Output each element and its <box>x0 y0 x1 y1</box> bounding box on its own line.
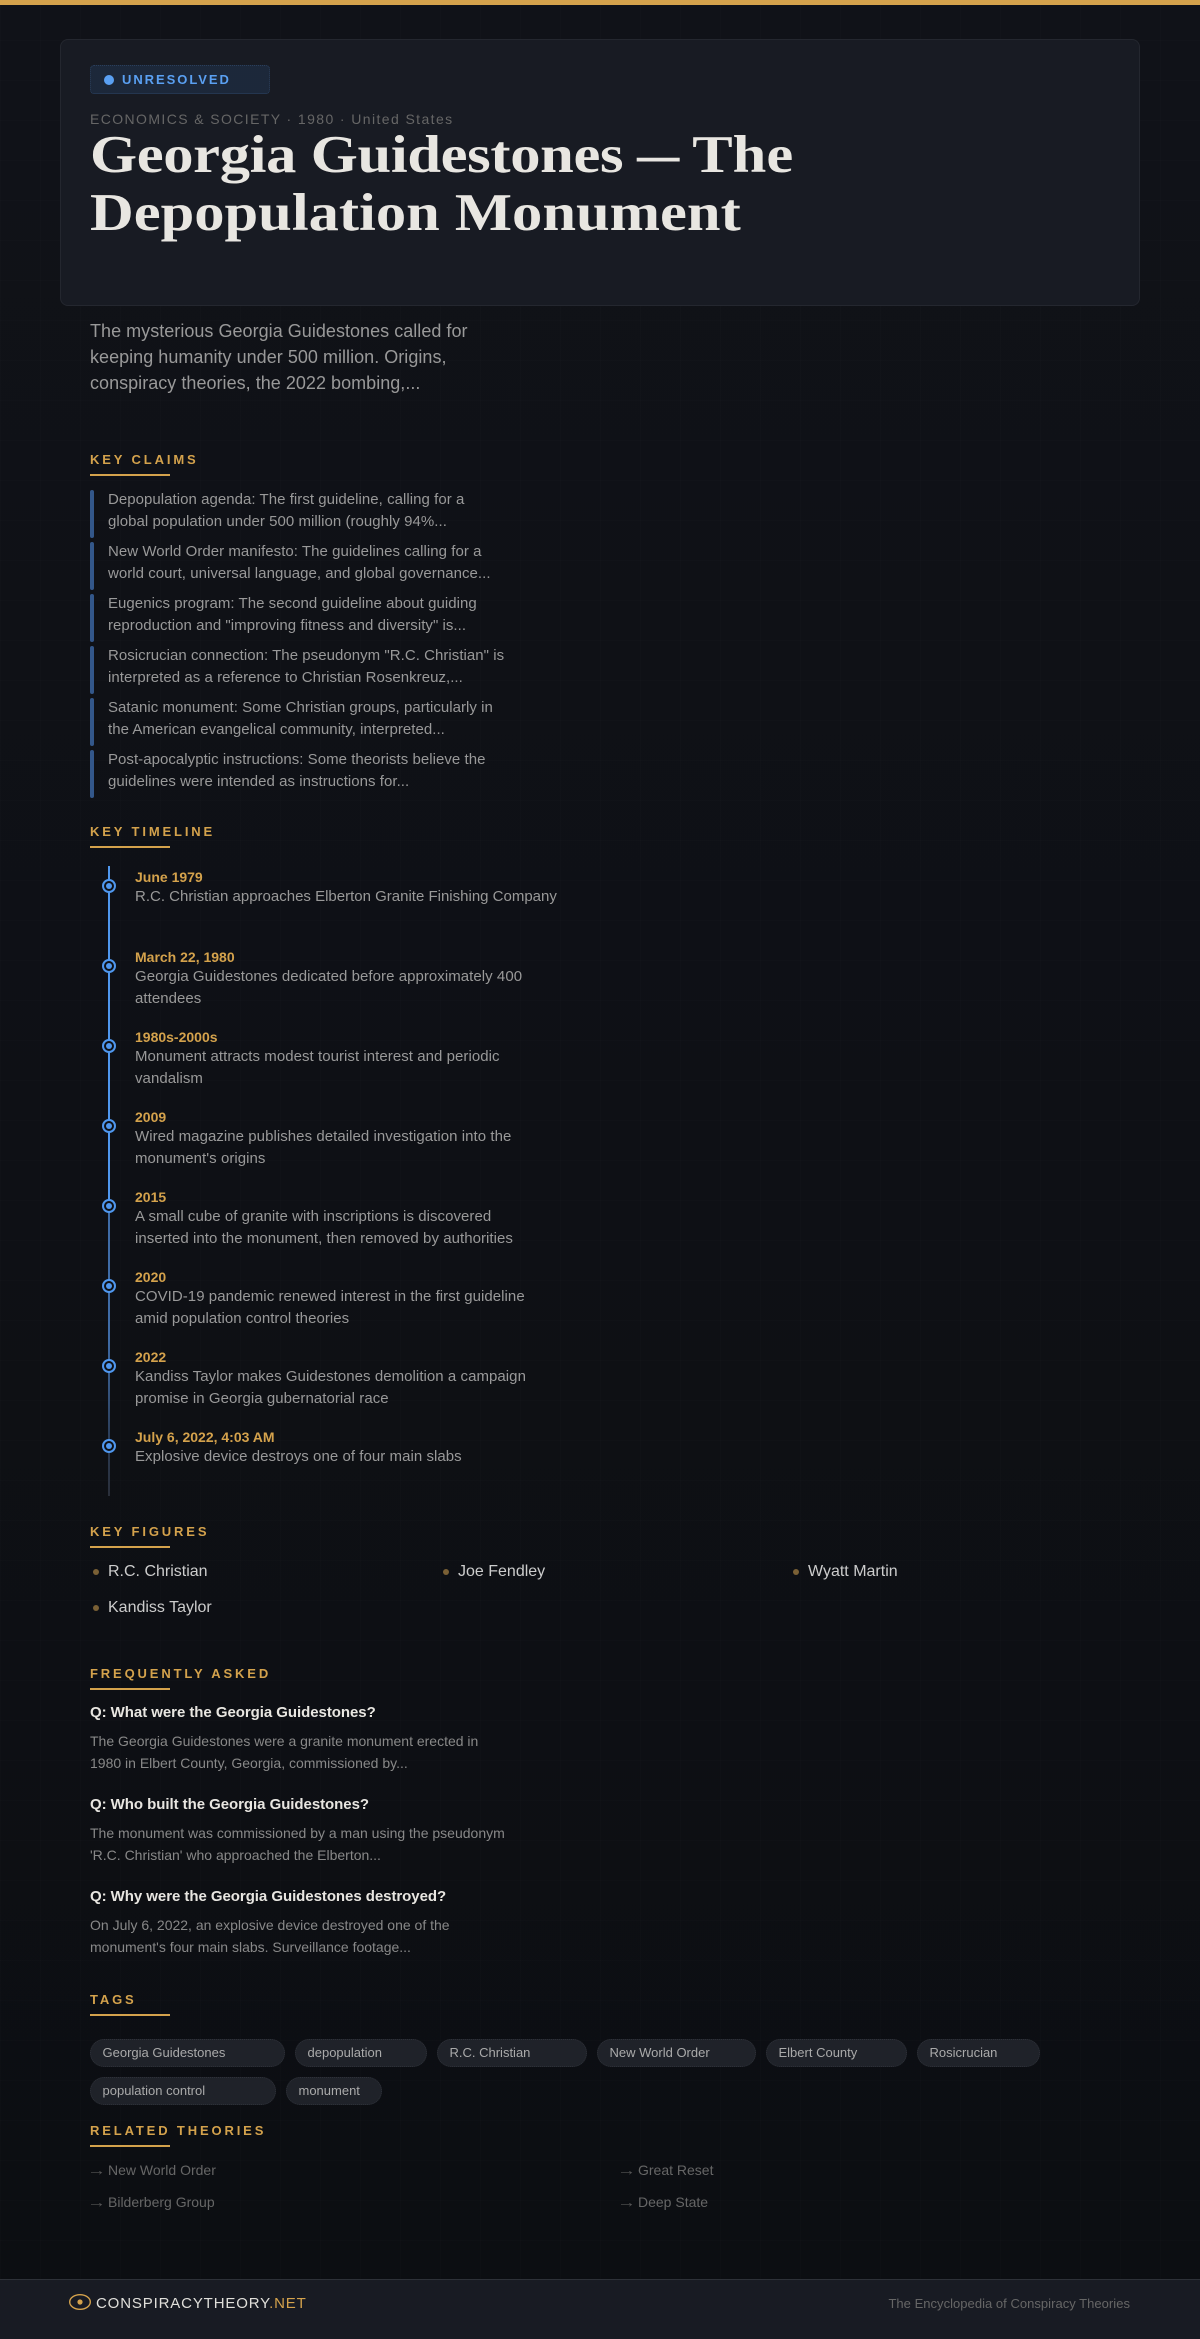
figure: Joe Fendley: Joe Fendley <box>458 1563 545 1580</box>
claim 2: world court, universal language, and global governance... <box>108 565 491 582</box>
tag <box>766 2039 907 2067</box>
event: 2015: inserted into the monument, then removed by authorities <box>135 1230 513 1247</box>
summary text <box>90 321 468 393</box>
event: July 6, 2022: Explosive device destroys one of four main slabs <box>135 1448 462 1465</box>
link: Great Reset: → <box>616 2162 635 2178</box>
faq 1: Q: What were the Georgia Guidestones? <box>90 1704 376 1721</box>
meta line: ECONOMICS & SOCIETY · 1980 · United States <box>90 111 454 127</box>
claim 3 <box>90 593 530 642</box>
link: Deep State: → <box>616 2194 635 2210</box>
link: Bilderberg Group: → <box>86 2194 105 2210</box>
tag: New World Order <box>610 2045 710 2060</box>
claim 3: reproduction and "improving fitness and diversity" is... <box>108 617 466 634</box>
event: March 22, 1980: March 22, 1980 <box>135 949 235 965</box>
summary text: conspiracy theories, the 2022 bombing,... <box>90 373 420 393</box>
claim 3: Eugenics program: The second guideline about guiding <box>108 595 477 612</box>
event: March 22, 1980: Georgia Guidestones dedicated before approximately 400 <box>135 968 522 985</box>
faq 2: 'R.C. Christian' who approached the Elberton... <box>90 1847 381 1863</box>
event: June 1979: R.C. Christian approaches Elberton Granite Finishing Company <box>135 888 557 905</box>
heading: tags: TAGS <box>90 1992 137 2007</box>
faq 1 <box>90 1704 478 1771</box>
event: June 1979: June 1979 <box>135 869 203 885</box>
heading: key figures: KEY FIGURES <box>90 1524 209 1539</box>
tag: Elbert County <box>778 2045 857 2060</box>
event: July 6, 2022 <box>102 1429 462 1465</box>
list: key figures <box>93 1563 898 1616</box>
figure: Wyatt Martin: Wyatt Martin <box>808 1563 898 1580</box>
title: Georgia Guidestones The <box>90 126 793 184</box>
claim 2 <box>90 541 530 590</box>
status badge: unresolved: UNRESOLVED <box>122 72 231 87</box>
event: 1980s-2000s: 1980s-2000s <box>135 1029 218 1045</box>
event: 2009 <box>102 1109 511 1167</box>
event: 1980s-2000s <box>102 1029 500 1087</box>
tag: R.C. Christian <box>450 2045 530 2060</box>
footer logo text: CONSPIRACYTHEORY.NET <box>96 2295 307 2312</box>
faq 2 <box>90 1796 505 1863</box>
claim 4 <box>90 645 530 694</box>
claim 5: the American evangelical community, interpreted... <box>108 721 445 738</box>
claim 6: Post-apocalyptic instructions: Some theorists believe the <box>108 751 485 768</box>
faq 1: The Georgia Guidestones were a granite monument erected in <box>90 1733 478 1749</box>
event: 2022: promise in Georgia gubernatorial race <box>135 1390 389 1407</box>
event: 2015: 2015 <box>135 1189 166 1205</box>
tag <box>917 2039 1040 2067</box>
title <box>90 126 793 242</box>
tag <box>597 2039 756 2067</box>
footer <box>0 2279 1200 2339</box>
claim 5 <box>90 697 530 746</box>
event: 2009: Wired magazine publishes detailed investigation into the <box>135 1128 511 1145</box>
event: 2015 <box>102 1189 513 1247</box>
claim 2: New World Order manifesto: The guidelines calling for a <box>108 543 482 560</box>
event: 2020: 2020 <box>135 1269 166 1285</box>
event: 2009: monument's origins <box>135 1150 266 1167</box>
heading: frequently asked: FREQUENTLY ASKED <box>90 1666 271 1681</box>
faq 3: monument's four main slabs. Surveillance footage... <box>90 1939 411 1955</box>
link: New World Order: → <box>86 2162 105 2178</box>
top accent bar <box>0 0 1200 5</box>
link: New World Order: New World Order <box>108 2162 216 2178</box>
link: Deep State: Deep State <box>638 2194 708 2210</box>
tag: population control <box>102 2083 205 2098</box>
heading: related theories: RELATED THEORIES <box>90 2123 266 2138</box>
tag list <box>90 2039 1040 2105</box>
claim 1 <box>90 489 530 538</box>
event: 2022: 2022 <box>135 1349 166 1365</box>
title: — <box>637 126 679 184</box>
claim 6: guidelines were intended as instructions for... <box>108 773 409 790</box>
tag: Rosicrucian <box>930 2045 997 2060</box>
event: June 1979 <box>102 869 557 905</box>
event: 2022 <box>102 1349 526 1407</box>
icon: eye logo <box>69 2294 91 2310</box>
heading: key timeline: KEY TIMELINE <box>90 824 215 839</box>
event: 2020: amid population control theories <box>135 1310 349 1327</box>
link: Great Reset: Great Reset <box>638 2162 713 2178</box>
tag: depopulation <box>308 2045 382 2060</box>
event: July 6, 2022: July 6, 2022, 4:03 AM <box>135 1429 275 1445</box>
figure: Kandiss Taylor: Kandiss Taylor <box>108 1599 212 1616</box>
tag <box>90 2077 276 2105</box>
faq 3: Q: Why were the Georgia Guidestones destroyed? <box>90 1888 446 1905</box>
summary text: keeping humanity under 500 million. Origins, <box>90 347 447 367</box>
event: March 22, 1980 <box>102 949 522 1007</box>
figure: R.C. Christian: R.C. Christian <box>108 1563 208 1580</box>
event: 1980s-2000s: vandalism <box>135 1070 203 1087</box>
tag <box>437 2039 587 2067</box>
claim 4: Rosicrucian connection: The pseudonym "R.C. Christian" is <box>108 647 504 664</box>
status badge: unresolved <box>90 65 270 94</box>
event: 2015: A small cube of granite with inscriptions is discovered <box>135 1208 491 1225</box>
claim 4: interpreted as a reference to Christian Rosenkreuz,... <box>108 669 463 686</box>
timeline events <box>102 869 557 1465</box>
claim 6 <box>90 749 530 798</box>
tag <box>286 2077 382 2105</box>
event: 1980s-2000s: Monument attracts modest tourist interest and periodic <box>135 1048 500 1065</box>
summary text: The mysterious Georgia Guidestones called for <box>90 321 468 341</box>
faq 2: Q: Who built the Georgia Guidestones? <box>90 1796 369 1813</box>
faq 2: The monument was commissioned by a man using the pseudonym <box>90 1825 505 1841</box>
link: Bilderberg Group: Bilderberg Group <box>108 2194 215 2210</box>
claim 1: Depopulation agenda: The first guideline, calling for a <box>108 491 464 508</box>
tag: Georgia Guidestones <box>102 2045 225 2060</box>
event: 2022: Kandiss Taylor makes Guidestones demolition a campaign <box>135 1368 526 1385</box>
claim 5: Satanic monument: Some Christian groups, particularly in <box>108 699 493 716</box>
faq 3 <box>90 1888 450 1955</box>
event: 2020 <box>102 1269 525 1327</box>
related theories links <box>86 2162 714 2210</box>
title: Depopulation Monument <box>90 184 741 242</box>
timeline axis <box>108 866 110 1496</box>
event: 2009: 2009 <box>135 1109 166 1125</box>
event: 2020: COVID-19 pandemic renewed interest in the first guideline <box>135 1288 525 1305</box>
faq 3: On July 6, 2022, an explosive device destroyed one of the <box>90 1917 450 1933</box>
panel: header <box>60 39 1140 306</box>
heading: key claims: KEY CLAIMS <box>90 452 199 467</box>
faq 1: 1980 in Elbert County, Georgia, commissioned by... <box>90 1755 408 1771</box>
claim 1: global population under 500 million (roughly 94%... <box>108 513 447 530</box>
footer tagline: The Encyclopedia of Conspiracy Theories <box>888 2296 1130 2311</box>
tag <box>90 2039 285 2067</box>
event: March 22, 1980: attendees <box>135 990 201 1007</box>
list: key claims <box>90 490 504 798</box>
tag <box>295 2039 427 2067</box>
tag: monument <box>298 2083 360 2098</box>
